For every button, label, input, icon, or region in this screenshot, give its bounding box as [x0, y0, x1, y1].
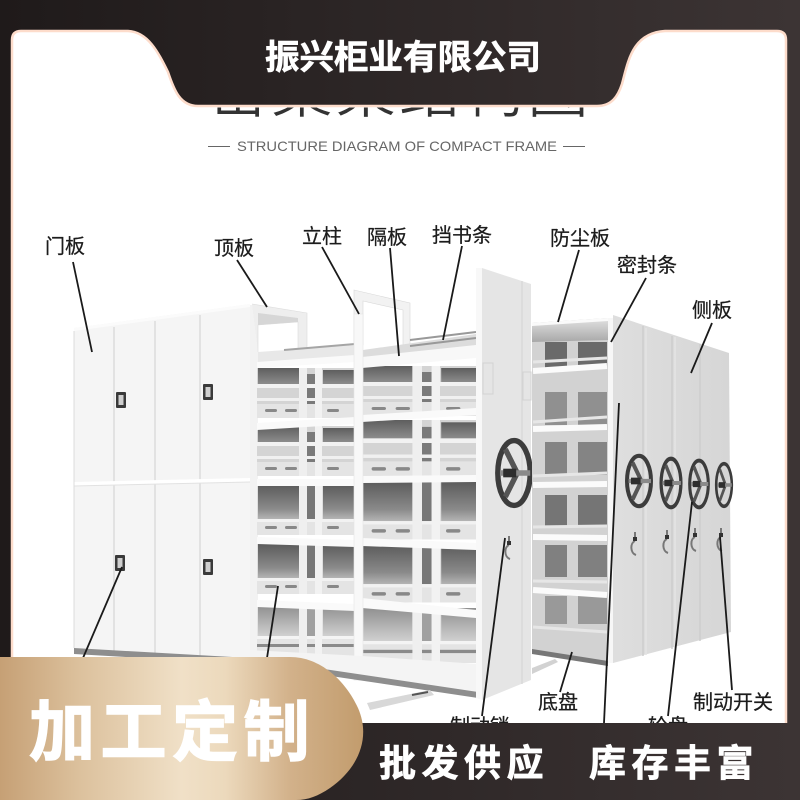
- icon: door handles: [115, 384, 213, 575]
- callout: door panel: [45, 235, 92, 352]
- panel: side panels with wheels: [608, 315, 732, 663]
- icon: hand wheels: [627, 456, 732, 507]
- callout: brake lock: [450, 538, 510, 738]
- callout: wheel: 轮盘: [648, 715, 688, 738]
- heading: chinese title (clipped by tab): 密集架结构图: [207, 57, 591, 126]
- callout: lower partition leader: [267, 586, 278, 658]
- icon: base rail: [367, 690, 434, 710]
- callout: book stop: [432, 224, 492, 340]
- callout: partition: [367, 226, 407, 356]
- callout: base: [538, 652, 578, 714]
- callout: dust board: 防尘板: [550, 227, 610, 250]
- compact shelving illustration: [74, 268, 732, 710]
- callout: dust board: [550, 227, 610, 322]
- bottom band: [0, 723, 800, 800]
- callout: side panel: [691, 299, 732, 373]
- gold badge: [0, 657, 363, 800]
- callout: base: 底盘: [538, 691, 578, 714]
- callout: top panel: 顶板: [214, 237, 254, 260]
- top frames: [252, 304, 307, 352]
- callout: lower door leader: [83, 567, 122, 658]
- callout: top panel: [214, 237, 267, 307]
- callout: door panel: 门板: [45, 235, 85, 258]
- company name: 振兴柜业有限公司: [265, 39, 541, 77]
- subtitle: STRUCTURE DIAGRAM OF COMPACT FRAME: [237, 138, 557, 154]
- callout: brake lock: 制动锁: [450, 715, 510, 738]
- slogan: stock: 库存丰富: [589, 743, 759, 784]
- callout: partition: 隔板: [367, 226, 407, 249]
- icon: brake latch: [505, 536, 511, 559]
- callout: column: [302, 225, 359, 314]
- icon: hand wheel: [498, 441, 530, 505]
- callout: brake switch: 制动开关: [693, 691, 773, 714]
- right bays: [362, 366, 478, 416]
- callout: column: 立柱: [302, 225, 342, 248]
- panel: open shelving frames: [74, 290, 478, 698]
- callout: long leader: [604, 403, 619, 723]
- callout: labels and leader lines: [45, 224, 773, 738]
- callout: seal strip: 密封条: [617, 254, 677, 277]
- icon: brake latches: [631, 528, 723, 555]
- panel: rear bay: [532, 318, 608, 674]
- middle upright: [354, 314, 363, 680]
- callout: side panel: 侧板: [692, 299, 732, 322]
- callout: brake switch: [693, 537, 773, 714]
- panel: end panel with wheel: [476, 268, 531, 700]
- slogan: wholesale: 批发供应: [379, 743, 549, 784]
- left bays: [257, 368, 354, 418]
- shelf bands: [257, 355, 355, 368]
- callout: seal strip: [611, 254, 677, 342]
- base deck: [250, 650, 478, 694]
- panel: cabinet doors: [74, 304, 250, 660]
- callout: book stop: 挡书条: [432, 224, 492, 247]
- badge text: 加工定制: [29, 695, 315, 769]
- callout: wheel: [648, 502, 692, 738]
